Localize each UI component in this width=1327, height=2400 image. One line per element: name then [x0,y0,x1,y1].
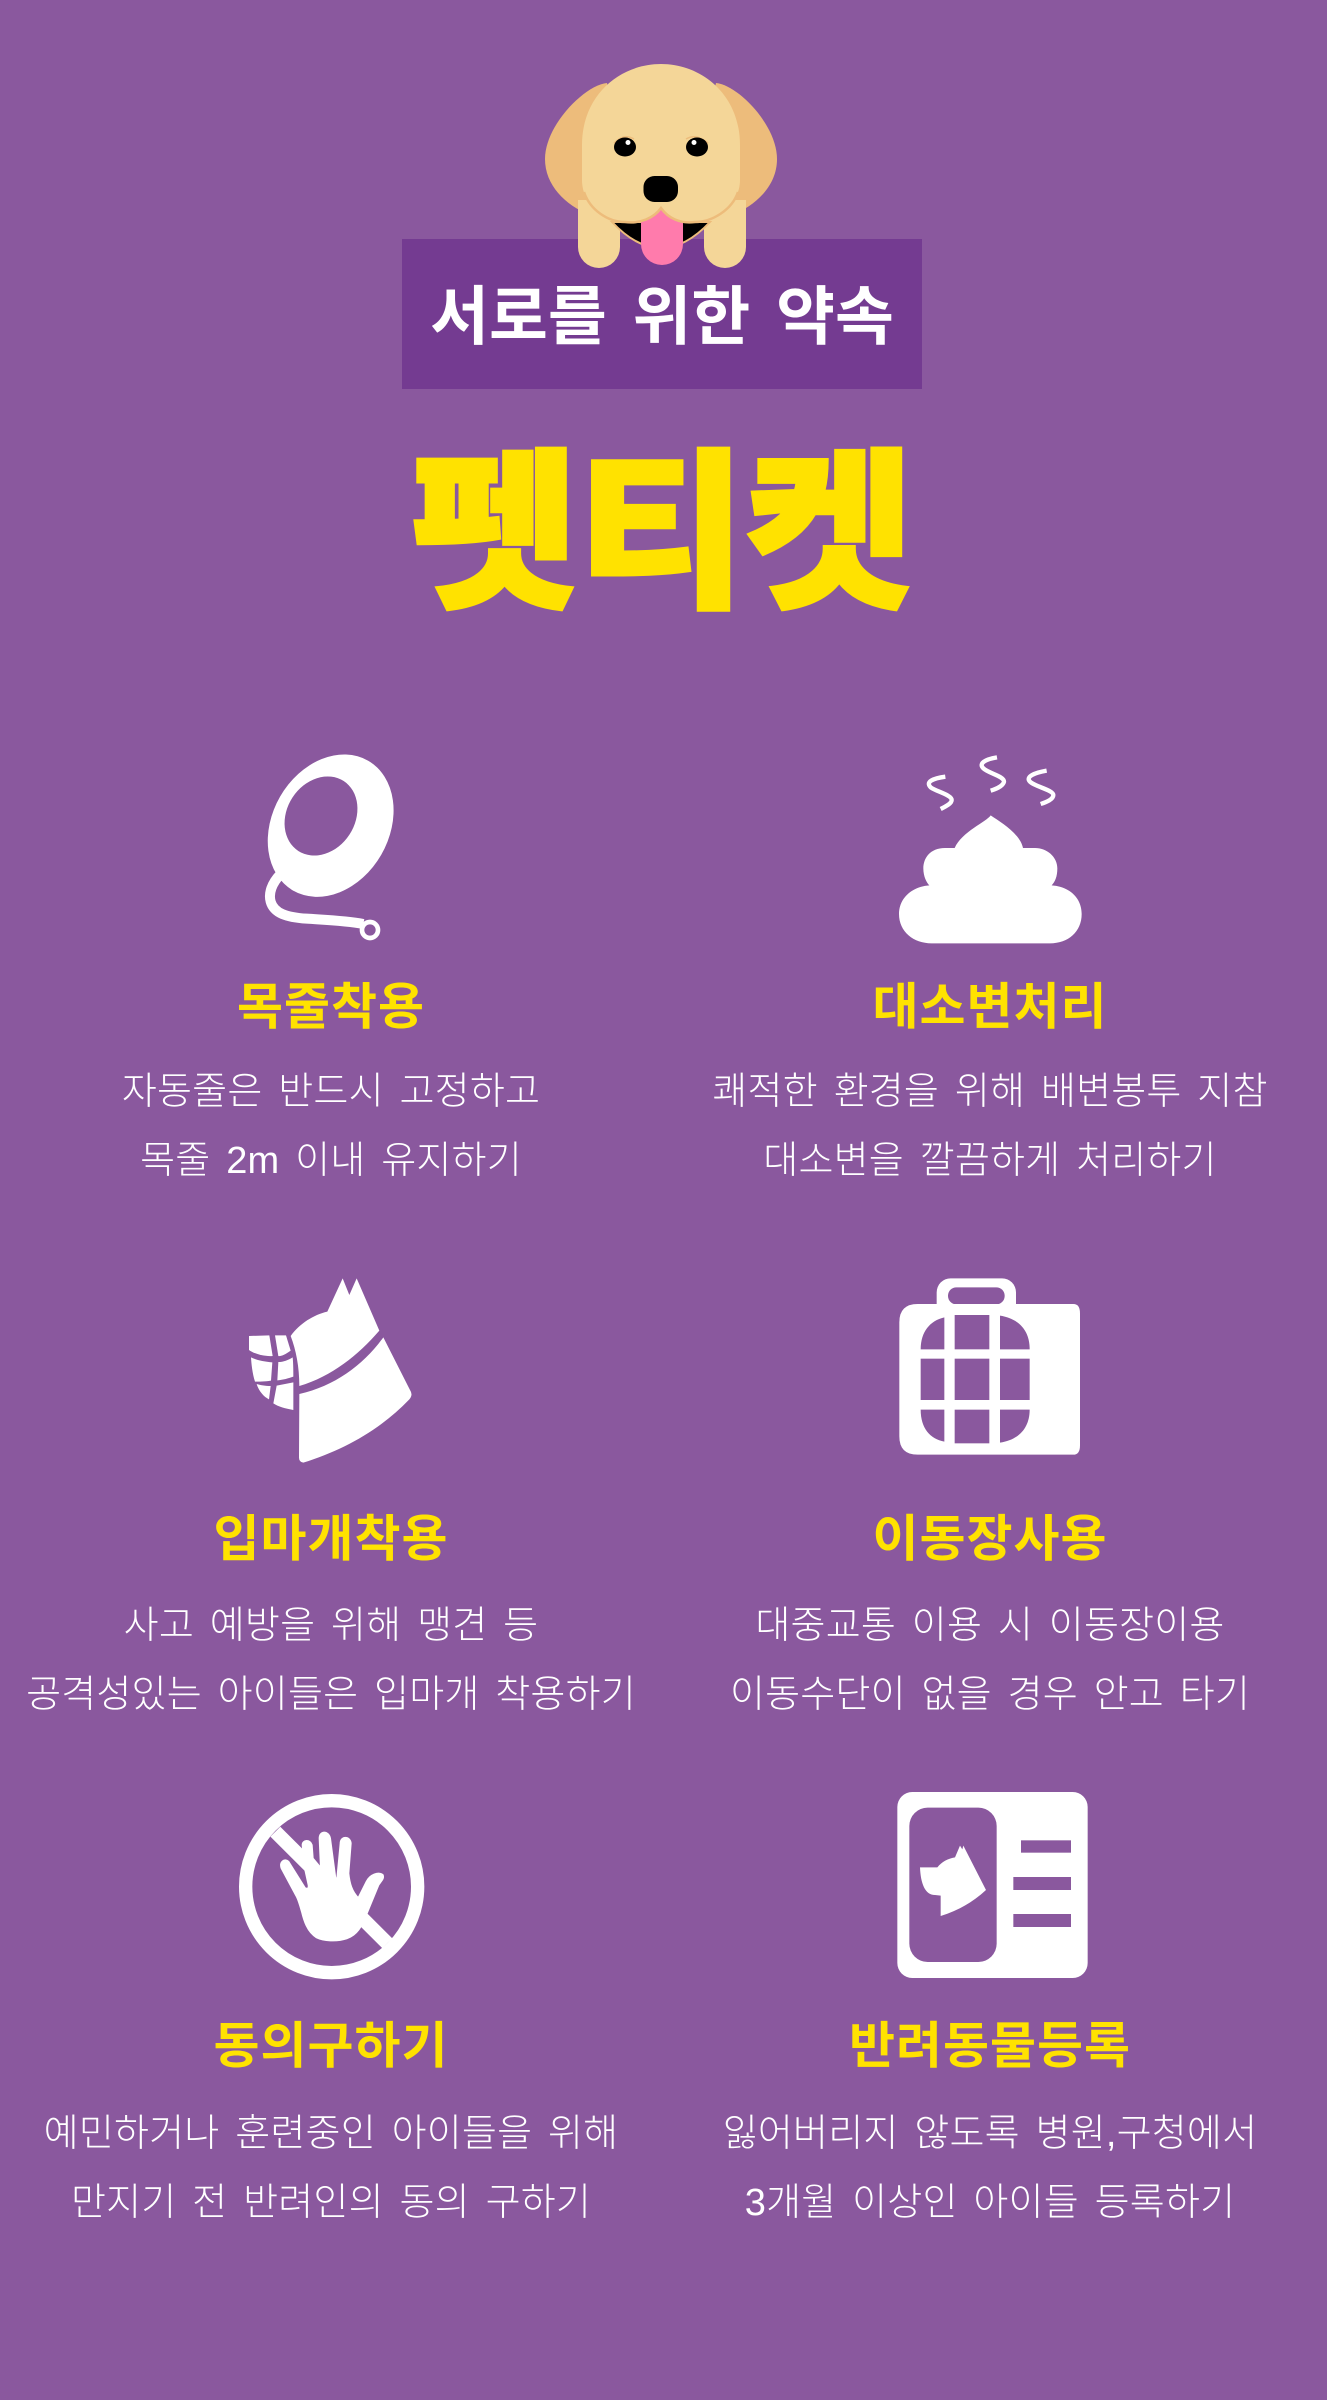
description: consent [44,2113,618,2224]
panel: leash [122,754,540,1182]
description: carrier: 이동수단이 없을 경우 안고 타기 [730,1674,1250,1716]
description: waste [712,1071,1268,1182]
heading: carrier: 이동장사용 [872,1511,1108,1567]
description: muzzle [26,1605,636,1716]
panel: waste [712,755,1268,1182]
icon: carrier [899,1278,1080,1455]
panel: consent [44,1794,618,2224]
title: 펫티켓 [411,438,913,630]
heading: consent: 동의구하기 [214,2018,448,2074]
icon: puppy [545,64,777,268]
description: waste: 대소변을 깔끔하게 처리하기 [763,1140,1217,1182]
icon: leash [264,754,394,940]
description: leash: 목줄 2m 이내 유지하기 [140,1140,522,1182]
description: carrier: 대중교통 이용 시 이동장이용 [755,1605,1225,1647]
description: waste: 쾌적한 환경을 위해 배변봉투 지참 [712,1071,1268,1113]
description: consent: 예민하거나 훈련중인 아이들을 위해 [44,2113,618,2155]
icon: no touching hand [239,1794,424,1980]
panel: carrier [730,1278,1250,1716]
description: leash: 자동줄은 반드시 고정하고 [122,1071,540,1113]
banner [402,239,922,389]
heading: waste: 대소변처리 [872,979,1108,1035]
description: consent: 만지기 전 반려인의 동의 구하기 [71,2182,591,2224]
description: leash [122,1071,540,1182]
heading: leash: 목줄착용 [237,979,425,1035]
panel: registration [723,1792,1257,2224]
icon: waste [899,755,1082,944]
description: registration: 3개월 이상인 아이들 등록하기 [745,2182,1235,2224]
banner heading: 서로를 위한 약속 [430,281,894,353]
icon: registration card [897,1792,1088,1978]
description: muzzle: 사고 예방을 위해 맹견 등 [124,1605,538,1647]
panel: muzzle [26,1278,636,1716]
description: muzzle: 공격성있는 아이들은 입마개 착용하기 [26,1674,636,1716]
description: carrier [730,1605,1250,1716]
description: registration: 잃어버리지 않도록 병원,구청에서 [723,2113,1257,2155]
icon: muzzle dog [249,1278,412,1463]
heading: registration: 반려동물등록 [849,2018,1131,2074]
heading: muzzle: 입마개착용 [214,1511,448,1567]
description: registration [723,2113,1257,2224]
